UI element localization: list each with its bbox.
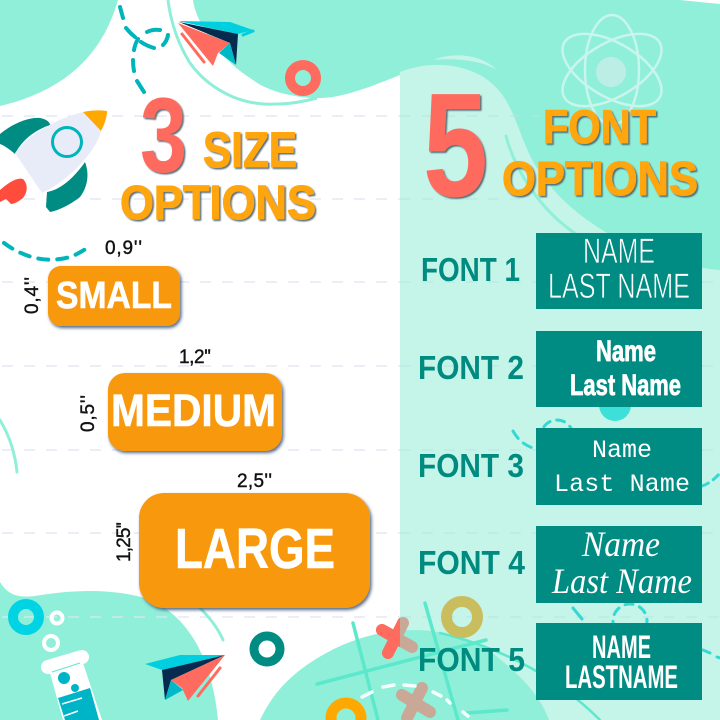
- height 0,4: 0,4'': [22, 277, 43, 314]
- sample box: [536, 428, 702, 505]
- numeral 5: 5: [423, 63, 488, 228]
- font row 3: [418, 428, 702, 505]
- label large: LARGE: [175, 517, 335, 581]
- badge medium: [108, 373, 282, 451]
- icon: coral ring: [290, 65, 316, 91]
- icon: test tube: [13, 604, 102, 720]
- label medium: MEDIUM: [111, 385, 276, 436]
- shape: top-center blob: [193, 0, 400, 98]
- arc: under large badge: [200, 608, 223, 640]
- sample last name: Last Name: [551, 561, 692, 601]
- sample name: Name: [596, 335, 656, 368]
- label font 1: FONT 1: [421, 251, 520, 288]
- numeral 3: 3: [140, 75, 187, 195]
- icon: paper plane top: [178, 21, 253, 66]
- icon: paper plane bottom: [145, 655, 225, 701]
- sample last name: Last Name: [570, 369, 681, 402]
- size option: medium: [78, 347, 282, 451]
- width 1,2: 1,2'': [179, 347, 211, 368]
- ring olive: [446, 602, 478, 632]
- icon: rocket: [0, 110, 107, 212]
- font row 2: [418, 331, 702, 407]
- panel: right background: [400, 0, 720, 720]
- shape: bottom-center blob: [260, 630, 549, 720]
- sample name: NAME: [583, 232, 655, 271]
- badge large: [139, 493, 370, 608]
- arc: right mint arc: [506, 136, 576, 234]
- label font 2: FONT 2: [418, 349, 524, 386]
- height 1,25: 1,25'': [114, 522, 135, 562]
- white dashes: [362, 685, 468, 716]
- heading: 5 font options: [423, 63, 698, 228]
- sample last name: Last Name: [554, 470, 690, 499]
- word font: FONT: [543, 100, 656, 153]
- guide dashes: [2, 116, 720, 617]
- word size: SIZE: [203, 122, 297, 178]
- cross tan: [402, 688, 430, 718]
- dashed curve above small badge: [4, 243, 87, 260]
- badge small: [48, 266, 180, 326]
- word options: OPTIONS: [120, 177, 316, 230]
- size option: small: [22, 238, 180, 326]
- sample box: [536, 331, 702, 407]
- font row 5: [418, 623, 702, 700]
- sample box: [536, 623, 702, 700]
- sample box: [536, 526, 702, 603]
- icon: atom: [551, 15, 673, 125]
- sample name: Name: [581, 524, 660, 564]
- ring orange: [331, 703, 361, 720]
- width 2,5: 2,5'': [237, 471, 272, 492]
- word options: OPTIONS: [502, 153, 698, 206]
- shape: top-left blob: [0, 0, 118, 106]
- shape: bottom-left blob: [0, 582, 218, 720]
- width 0,9: 0,9'': [105, 238, 142, 259]
- shape: top arc: [168, 0, 317, 104]
- label font 4: FONT 4: [418, 544, 526, 581]
- size option: large: [114, 471, 370, 608]
- sample name: Name: [592, 436, 652, 465]
- decoration: cyan accents behind font boxes: [513, 389, 720, 658]
- label small: SMALL: [56, 275, 172, 317]
- label font 5: FONT 5: [418, 641, 525, 678]
- sample box: [536, 233, 702, 309]
- icon: tic tac toe: [317, 602, 600, 720]
- icon: dashed flight path: [120, 7, 168, 92]
- icon: teal ring: [254, 636, 280, 662]
- sample name: NAME: [592, 629, 651, 665]
- heading: 3 size options: [120, 75, 316, 230]
- arc: left edge: [0, 420, 17, 472]
- cross coral: [382, 623, 412, 653]
- font row 4: [418, 524, 702, 603]
- font row 1: [421, 232, 702, 309]
- height 0,5: 0,5'': [78, 395, 99, 432]
- label font 3: FONT 3: [418, 447, 524, 484]
